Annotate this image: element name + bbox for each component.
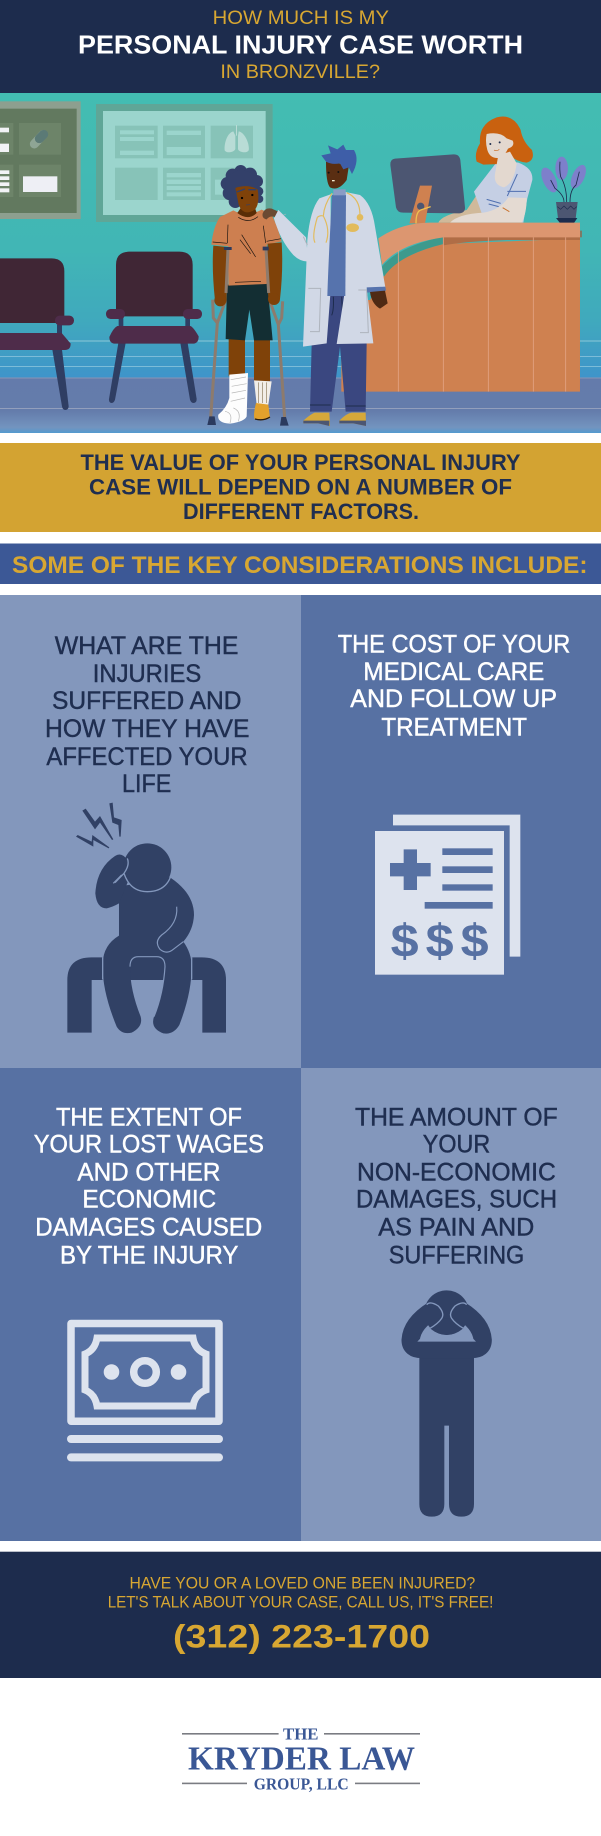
head and hair [221,165,263,217]
banner: value depends on factors: DIFFERENT FACTORS. [183,499,419,524]
panel: injuries suffered [0,595,301,1068]
panel text: AFFECTED YOUR [46,743,248,771]
illustration: hospital waiting room [0,93,601,433]
icon: lungs [225,125,249,152]
reception desk and receptionist [341,117,589,392]
wall boards and chairs [0,101,273,410]
logo: The Kryder Law Group [182,1724,420,1793]
panel text: ECONOMIC [82,1186,216,1214]
banner: value depends on factors [0,443,601,532]
panel text: BY THE INJURY [60,1242,239,1270]
panel: non-economic damages [301,1068,601,1541]
panel text: AND FOLLOW UP [350,685,557,713]
header line 1: HOW MUCH IS MY [213,7,389,29]
icon: banknote [67,1324,223,1461]
chair right [106,252,202,403]
boy on crutches [207,165,289,426]
banner: key considerations [0,544,601,584]
shoes [303,413,366,426]
banner: value depends on factors: CASE WILL DEPEND ON A NUMBER OF [89,474,512,500]
white coat [274,192,386,347]
icon: medical bill [375,815,520,975]
logo: The Kryder Law Group: GROUP, LLC [254,1774,349,1793]
shirt creases [213,217,281,282]
call to action band [0,1552,601,1678]
panel text: HOW THEY HAVE [45,715,250,743]
notice board left [0,101,81,219]
panel text: YOUR [423,1130,490,1158]
panel text: THE EXTENT OF [56,1103,242,1131]
doctor's hand on shoulder [262,208,297,240]
banner: value depends on factors: THE VALUE OF YOUR PERSONAL INJURY [80,450,520,475]
panel text: INJURIES [93,660,201,688]
panel text: TREATMENT [381,713,527,741]
sock and shoe [254,380,272,420]
panel: medical care cost [301,595,601,1068]
crutch lower parts [207,300,289,426]
computer monitor [390,154,465,223]
banner: key considerations: SOME OF THE KEY CONSIDERATIONS INCLUDE: [12,552,588,579]
call to action band: HAVE YOU OR A LOVED ONE BEEN INJURED? [130,1574,475,1593]
panel text: AS PAIN AND [378,1214,534,1242]
panel text: NON-ECONOMIC [357,1159,556,1187]
panel text: SUFFERED AND [52,687,242,715]
icon: medical bill: $ [461,915,489,967]
panel text: LIFE [122,770,171,798]
icon: medical bill: $ [426,915,454,967]
stethoscope [314,193,360,243]
legs [229,338,270,381]
panel text: THE AMOUNT OF [355,1103,558,1131]
panel text: THE COST OF YOUR [338,630,570,658]
panel text: WHAT ARE THE [55,632,238,660]
panel text [338,630,570,741]
phone number: (312) 223-1700 [173,1618,430,1654]
chair left [0,258,74,410]
cast [218,373,248,424]
panel text [355,1103,558,1270]
panel text: DAMAGES, SUCH [356,1186,557,1214]
icon: person covering face [411,1290,483,1517]
logo: The Kryder Law Group: THE [283,1724,318,1743]
panel text: SUFFERING [389,1242,524,1270]
title: PERSONAL INJURY CASE WORTH [78,30,523,60]
shorts [226,283,273,340]
shirt and face [321,145,357,296]
panel text [45,632,250,798]
t-shirt [211,210,282,286]
panel text [34,1103,264,1270]
panel text: AND OTHER [77,1159,220,1187]
header band [0,0,601,93]
call to action band: LET'S TALK ABOUT YOUR CASE, CALL US, IT'S FREE! [108,1592,493,1611]
panel text: MEDICAL CARE [363,658,544,686]
medical chart board [96,104,273,222]
receptionist [438,117,533,223]
icon: medical bill: $ [391,915,419,967]
arms [213,242,282,306]
crutch upper parts [224,247,269,293]
doctor [274,145,388,426]
header line 3: IN BRONZVILLE? [220,61,380,83]
panel: lost wages [0,1068,301,1541]
potted plant [538,157,589,223]
desk counter [341,223,582,392]
icon: person with headache [67,803,226,1034]
panel text: YOUR LOST WAGES [34,1130,264,1158]
panel text: DAMAGES CAUSED [35,1214,262,1242]
logo: The Kryder Law Group: KRYDER LAW [188,1740,415,1777]
